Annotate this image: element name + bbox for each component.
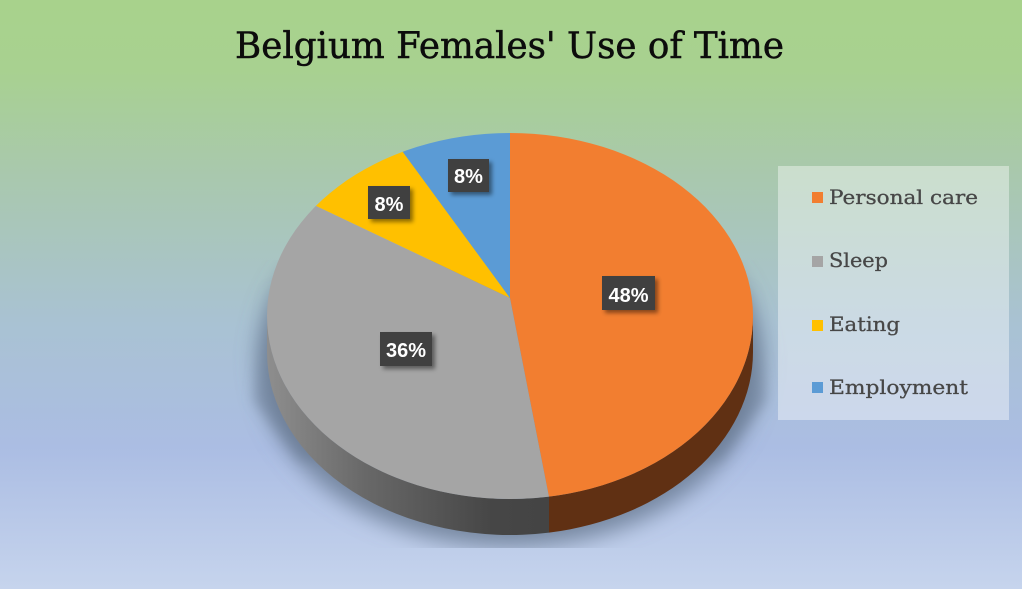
data label: eating 8%: 8%: [375, 194, 404, 216]
data label: 36%: [380, 332, 432, 366]
legend item: sleep: Sleep: [829, 248, 888, 272]
legend item: eating: Eating: [829, 312, 900, 336]
slice: personal care 48%: [510, 133, 753, 497]
legend panel: [778, 166, 1009, 420]
3D pie chart: [250, 120, 770, 535]
title: Belgium Females' Use of Time: [235, 26, 784, 67]
slice: eating 8%: [316, 151, 510, 298]
pie top face: [267, 133, 753, 499]
slice: sleep 36%: [267, 206, 549, 499]
data label: employment 8%: 8%: [454, 166, 483, 188]
data label: 36%: 36%: [386, 340, 426, 362]
pie side: sleep: [267, 316, 549, 535]
slice: employment 8%: [402, 133, 510, 298]
data label: eating 8%: [368, 186, 410, 219]
data label: 48%: [602, 276, 655, 310]
legend item: employment: Employment: [829, 375, 968, 399]
legend item: personal care: Personal care: [829, 185, 978, 209]
data label: 48%: 48%: [608, 285, 649, 307]
data label: employment 8%: [448, 159, 489, 192]
pie shadow: [246, 260, 774, 548]
pie side: personal care: [549, 316, 753, 533]
